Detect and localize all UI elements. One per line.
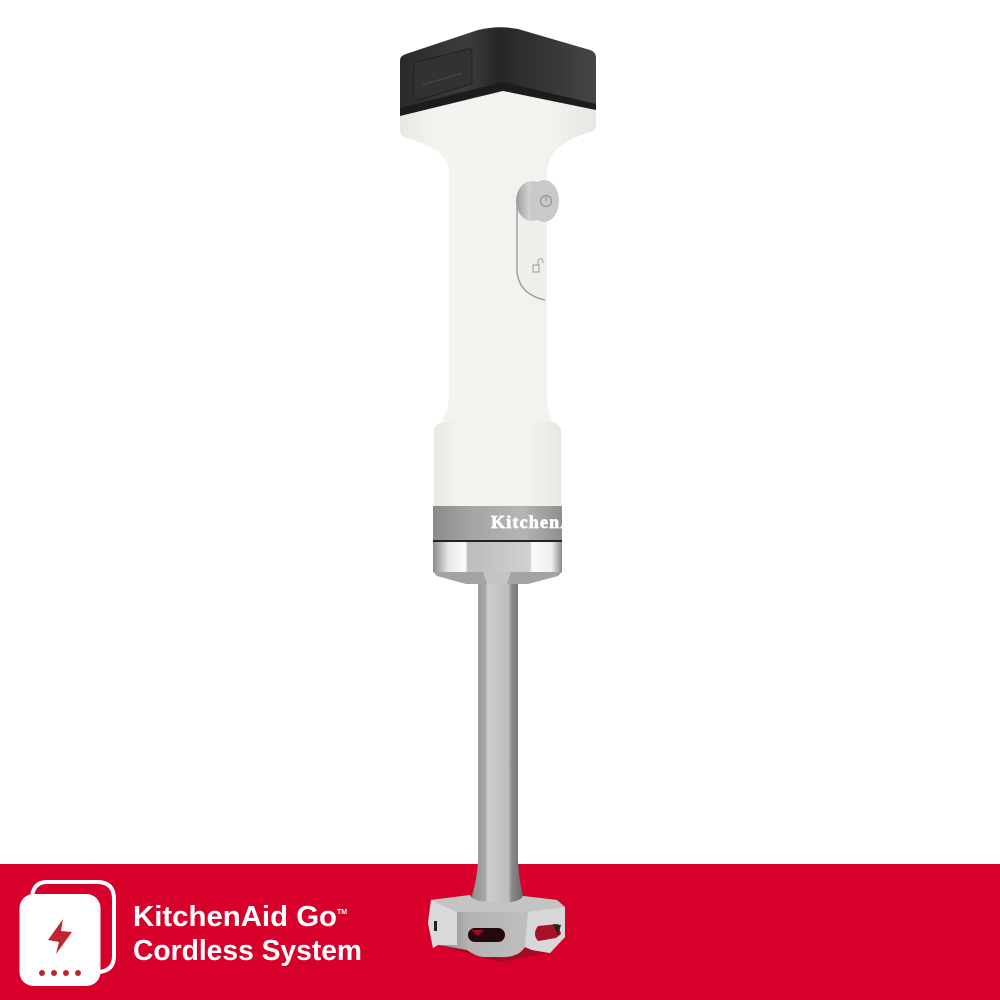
product: cordless hand blender [400, 27, 596, 962]
unlock icon [533, 259, 543, 272]
shadow under guard [438, 936, 552, 962]
red footer banner [0, 864, 1000, 1000]
left panel [428, 900, 457, 948]
control slot [517, 205, 547, 300]
metal band with logo: KitchenAid [491, 512, 592, 532]
blade guard [428, 895, 565, 962]
indicator dots [39, 970, 81, 976]
guard windows [468, 928, 505, 942]
front battery block [20, 894, 100, 986]
icon: cordless battery [20, 882, 114, 986]
chrome ring and taper [433, 542, 562, 584]
heading: KitchenAid Go Cordless System: TM [337, 909, 347, 916]
heading: KitchenAid Go Cordless System: Cordless System [133, 935, 362, 967]
top surface [431, 895, 565, 912]
collar [434, 420, 561, 507]
lightning bolt [48, 919, 72, 954]
right panel [525, 907, 565, 953]
power button [516, 180, 559, 222]
handle and shoulder: white body [400, 91, 596, 420]
battery cap: dark top [400, 27, 596, 118]
blade shaft [468, 580, 526, 906]
back outline [32, 882, 114, 972]
heading: KitchenAid Go Cordless System [133, 901, 362, 967]
metal band with logo [433, 506, 562, 542]
heading: KitchenAid Go Cordless System: KitchenAid Go [133, 901, 337, 933]
